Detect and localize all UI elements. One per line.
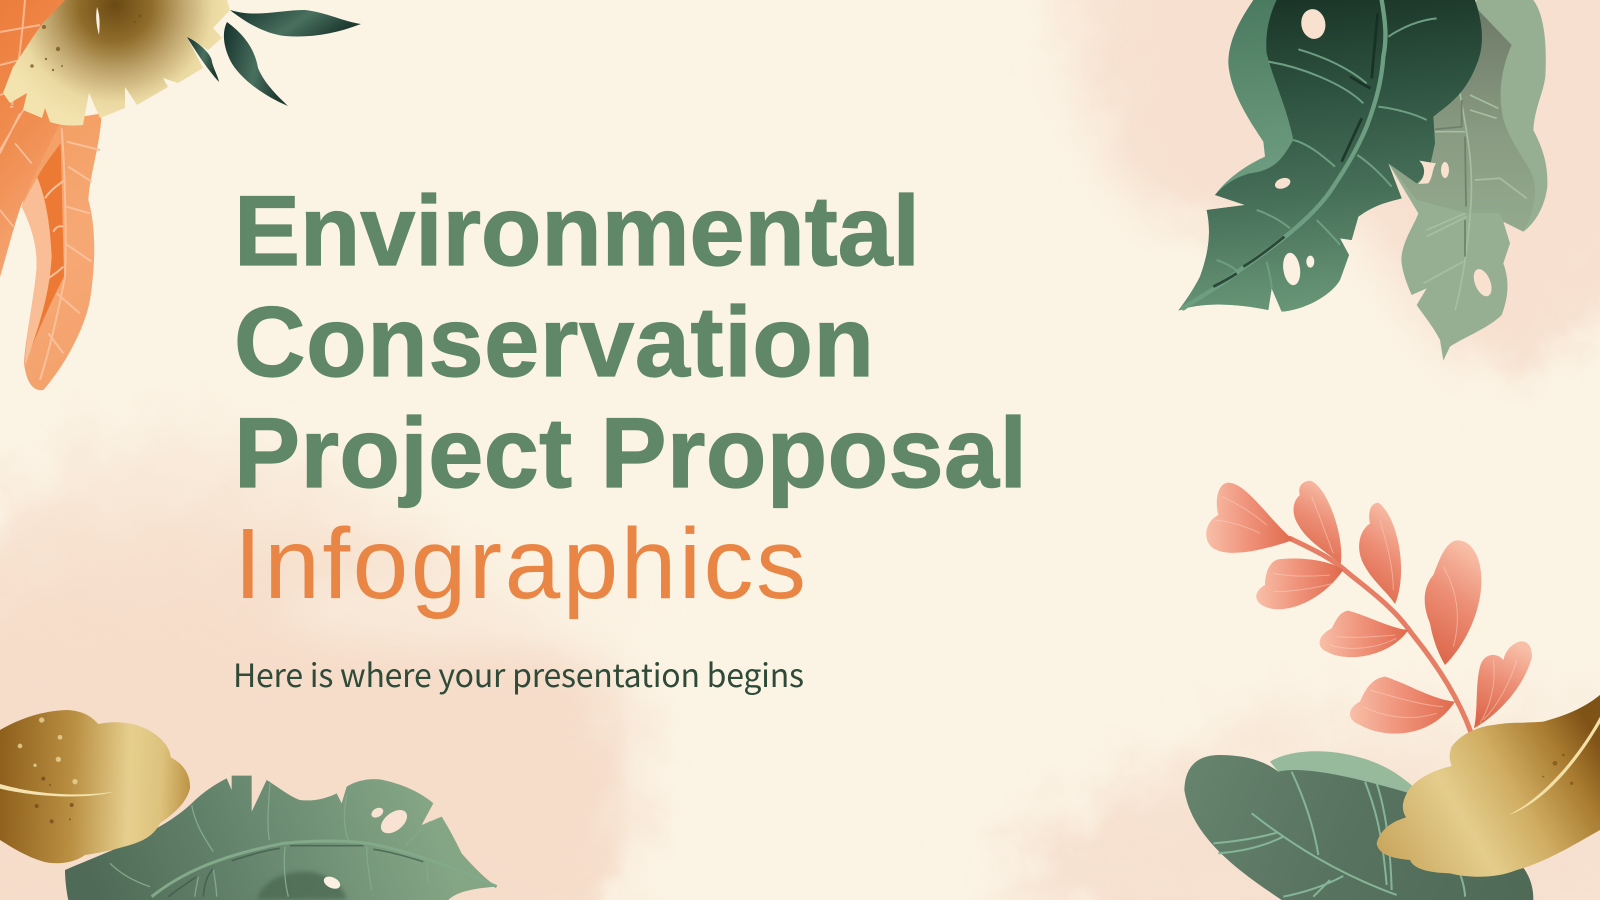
blush wash: lower right	[990, 698, 1600, 900]
underside of back leaf	[1388, 7, 1535, 232]
subtitle: Here is where your presentation begins	[233, 651, 804, 697]
title line 1: Environmental	[234, 175, 920, 286]
illustration: top-left dark leaflets	[187, 10, 361, 106]
blush wash: top right	[1040, 0, 1600, 365]
title line 2: Conservation	[234, 286, 874, 397]
illustration: bottom-left green leaf	[65, 776, 497, 900]
midrib and veins	[152, 841, 497, 897]
gold speckles	[1542, 754, 1573, 785]
orange back leaf	[0, 0, 72, 277]
title line 3: Project Proposal	[234, 397, 1027, 508]
gold speckles	[35, 777, 74, 823]
illustration: top-right back leaf	[1388, 0, 1547, 361]
illustration: bottom-right green leaf	[1184, 751, 1533, 900]
shaded patch	[257, 871, 347, 899]
gold speckles	[30, 15, 141, 71]
illustration: top-left orange leaves	[0, 0, 102, 390]
dark leaf face	[1178, 0, 1482, 312]
orange veins	[40, 128, 100, 380]
coral leaflets	[1206, 481, 1532, 734]
dark orange stripe	[32, 143, 64, 347]
title line 4: Infographics	[234, 508, 806, 620]
back leaf holes	[1470, 267, 1495, 299]
front leaf holes	[1299, 7, 1328, 41]
coral stem	[1290, 538, 1471, 732]
gold leaf highlight	[1508, 717, 1600, 815]
light sliver	[22, 177, 52, 367]
pale speckles	[18, 717, 78, 784]
illustration: bottom-left gold leaf	[0, 710, 190, 863]
illustration: coral sprig	[1206, 481, 1532, 734]
cream patch inside wash	[280, 570, 660, 650]
orange front leaf	[22, 113, 102, 390]
leaf holes	[377, 805, 411, 838]
illustration: top-left gold leaf	[3, 0, 230, 126]
blush wash: lower left	[0, 410, 631, 870]
green leaf veins	[1213, 772, 1465, 897]
illustration: top-right front leaf	[1178, 0, 1482, 312]
back leaf veins	[1423, 93, 1527, 310]
title	[234, 175, 1027, 620]
illustration: bottom-right gold leaf	[1377, 695, 1600, 877]
midrib and veins	[1183, 0, 1385, 308]
gold leaf highlight	[0, 784, 115, 797]
white slit	[96, 7, 100, 35]
